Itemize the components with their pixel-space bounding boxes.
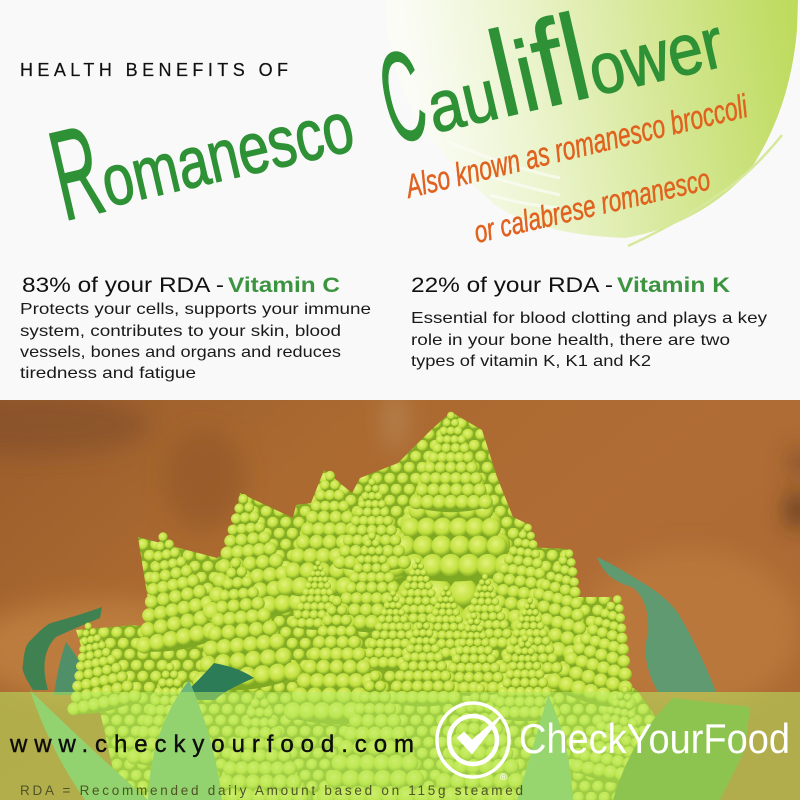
brush circle backdrop (386, 0, 798, 246)
heading: health benefits of: HEALTH BENEFITS OF (20, 60, 288, 80)
logo icon: check mark in circle: ® (500, 772, 508, 783)
heading: vitamin C: Vitamin C (228, 274, 340, 297)
leaf: far left (30, 690, 148, 800)
overlay band (0, 692, 800, 800)
title: Romanesco Cauliflower: C (367, 23, 438, 171)
website url: www.checkyourfood.com (9, 731, 414, 758)
leaf: right (597, 557, 716, 692)
text: vitamin K description: Essential for blood clotting and plays a key (411, 310, 767, 327)
text: vitamin K description: role in your bone health, there are two (411, 332, 730, 349)
heading: vitamin C: 83% of your RDA - (22, 274, 224, 297)
heading: vitamin C (22, 274, 340, 297)
leaf: left curl (22, 607, 102, 690)
footnote: RDA: RDA = Recommended daily Amount based on 115g steamed (20, 783, 523, 798)
leaf: small front dark (192, 663, 254, 700)
text: vitamin C description: system, contributes to your skin, blood (20, 323, 341, 340)
logo icon: check mark in circle (437, 703, 509, 783)
text: vitamin C description: vessels, bones and organs and reduces (20, 344, 341, 361)
text: vitamin C description: tiredness and fatigue (20, 365, 196, 382)
panel: vitamin K (411, 274, 767, 370)
wood background (0, 390, 800, 800)
romanesco head (51, 411, 666, 800)
title: Romanesco Cauliflower (38, 0, 733, 248)
title: Romanesco Cauliflower: R (38, 99, 115, 248)
text: vitamin C description: Protects your cells, supports your immune (20, 301, 371, 318)
leaf: front left pale (148, 680, 222, 800)
leaf: left back (54, 642, 80, 695)
subtitle: or calabrese romanesco: or calabrese romanesco (471, 162, 713, 250)
text: vitamin C description (20, 301, 371, 382)
text: vitamin K description: types of vitamin K, K1 and K2 (411, 353, 651, 370)
leaf: front right large (613, 698, 750, 800)
photo: romanesco on wood table (0, 390, 800, 800)
heading: vitamin K: Vitamin K (617, 274, 730, 297)
text: vitamin K description (411, 310, 767, 370)
panel: vitamin C (20, 274, 371, 382)
title: Romanesco Cauliflower: omanesco (94, 87, 361, 223)
heading: vitamin K: 22% of your RDA - (411, 274, 613, 297)
leaf: front right small (517, 695, 573, 800)
heading: vitamin K (411, 274, 730, 297)
